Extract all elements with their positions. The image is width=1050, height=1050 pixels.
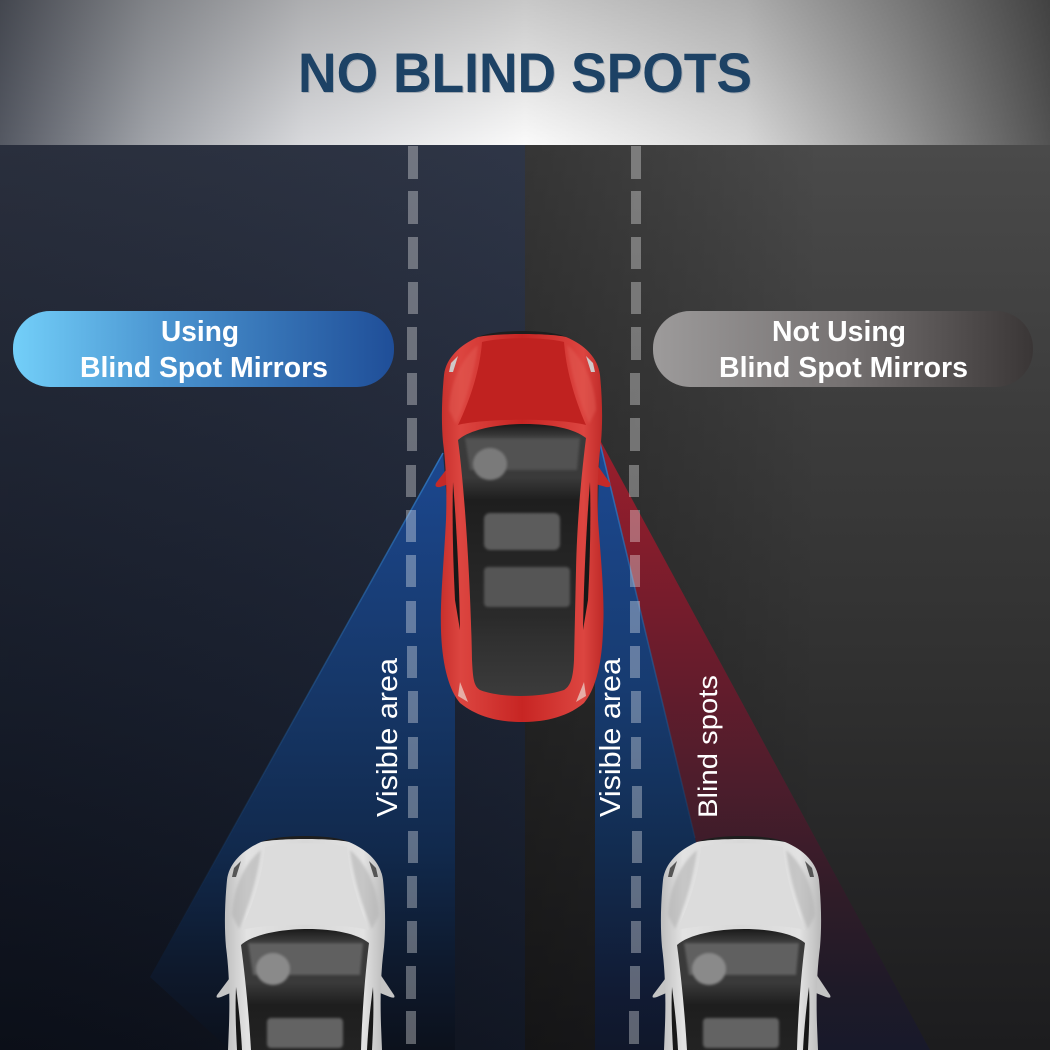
pill: not using blind spot mirrors: Not Using (772, 316, 906, 348)
icon: white car left (216, 836, 394, 1050)
visible area cone right (595, 443, 750, 1050)
visible area cone left (150, 453, 455, 1050)
interior (684, 943, 799, 1048)
icon: red car (436, 331, 610, 722)
glass roof (458, 424, 586, 696)
interior (248, 943, 363, 1048)
pill: using blind spot mirrors (13, 311, 394, 387)
glass roof (677, 929, 805, 1050)
lane markings right (629, 146, 642, 1044)
blind spot cone red (600, 440, 930, 1050)
panel: right road not using mirrors (525, 145, 1050, 1050)
header band (0, 0, 1050, 145)
side windows (236, 987, 242, 1050)
lane markings left (406, 146, 418, 1044)
label: visible area right: Visible area (595, 657, 627, 817)
pill: using blind spot mirrors: Blind Spot Mirrors (80, 352, 328, 384)
label: visible area left: Visible area (372, 657, 404, 817)
label: blind spots: Blind spots (693, 675, 723, 818)
icon: white car right (652, 836, 830, 1050)
side windows (453, 482, 460, 630)
side windows (672, 987, 678, 1050)
panel: left road using mirrors (0, 145, 525, 1050)
pill: not using blind spot mirrors (653, 311, 1033, 387)
title: NO BLIND SPOTS (298, 41, 752, 104)
interior (465, 438, 580, 607)
pill: not using blind spot mirrors: Blind Spot Mirrors (719, 352, 968, 384)
glass roof (241, 929, 369, 1050)
pill: using blind spot mirrors: Using (161, 316, 239, 348)
